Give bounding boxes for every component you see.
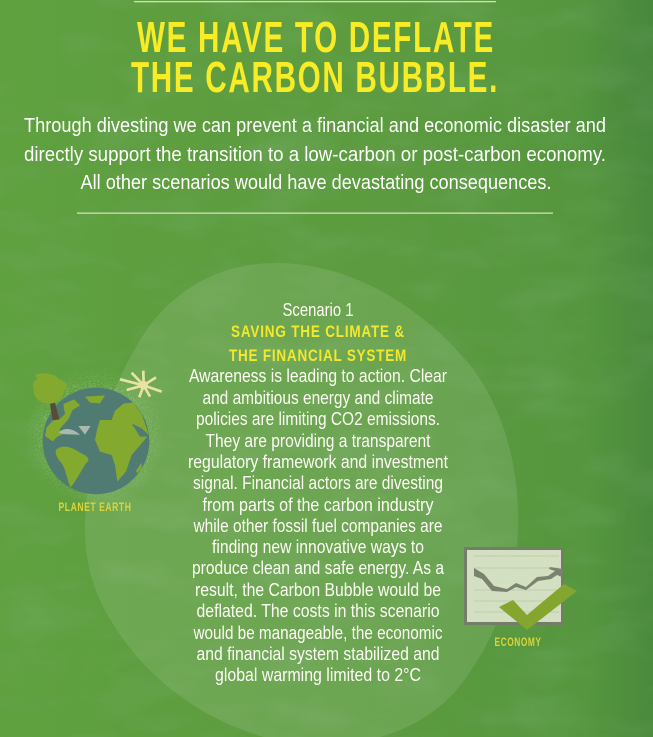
chart speckle [467,550,561,622]
scenario body: produce clean and safe energy. As a [192,558,445,578]
scenario label: Scenario 1 [282,300,354,320]
scenario text block [188,300,448,685]
scenario heading: SAVING THE CLIMATE & [231,322,405,341]
icon: planet earth [24,366,166,507]
title [131,13,499,102]
lower divider [77,212,553,214]
scenario body: global warming limited to 2°C [215,665,421,685]
sun [120,371,162,397]
tree trunk [50,403,59,420]
tree foliage [33,373,67,404]
label: economy: ECONOMY [494,635,542,649]
scenario heading: THE FINANCIAL SYSTEM [229,346,407,365]
scenario body: regulatory framework and investment [188,452,448,472]
scenario body: from parts of the carbon industry [202,495,434,515]
scenario body: They are providing a transparent [206,431,430,451]
scenario body: and financial system stabilized and [196,644,440,664]
scenario body [188,366,448,685]
scenario body: signal. Financial actors are divesting [193,473,443,493]
scenario body: finding new innovative ways to [212,537,424,557]
scenario body: and ambitious energy and climate [202,388,434,408]
scenario heading [229,322,407,365]
chart frame [466,548,562,624]
intro text: directly support the transition to a low-carbon or post-carbon economy. [24,144,606,166]
check mark [499,584,577,630]
scenario body: while other fossil fuel companies are [193,516,442,536]
icon: economy chart [466,548,577,630]
scenario body: would be manageable, the economic [193,623,442,643]
scenario body: deflated. The costs in this scenario [196,601,440,621]
intro text: Through divesting we can prevent a financial and economic disaster and [24,115,606,137]
clouds [59,426,91,435]
panel: scenario bubble [85,263,518,737]
title: WE HAVE TO DEFLATE [137,13,495,62]
label: planet earth: PLANET EARTH [58,500,132,514]
south america [56,447,88,487]
scenario body: policies are limiting CO2 emissions. [196,409,440,429]
intro text: All other scenarios would have devastating consequences. [80,172,552,194]
africa and eurasia [95,403,149,482]
scenario body: result, the Carbon Bubble would be [195,580,441,600]
trend line [474,567,563,592]
intro text [24,115,606,194]
north america [45,399,80,441]
madagascar [136,463,142,473]
scenario body: Awareness is leading to action. Clear [189,366,447,386]
top divider [134,1,496,2]
